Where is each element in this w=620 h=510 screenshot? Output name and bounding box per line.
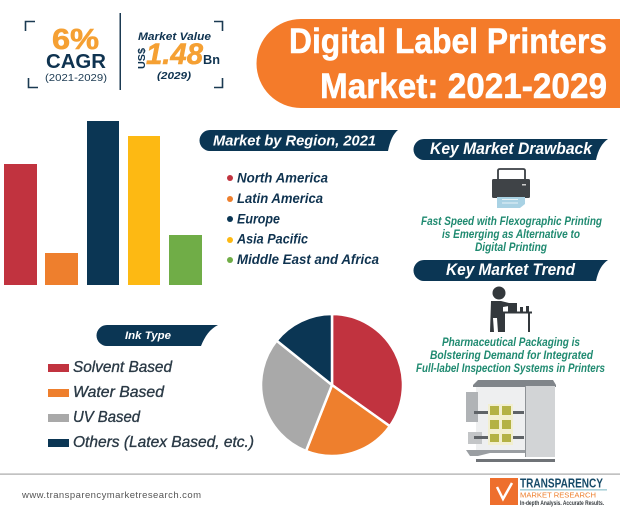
legend: regions: Latin America: [237, 191, 323, 206]
legend: regions: North America: [237, 170, 328, 186]
legend: regions: Asia Pacific: [236, 232, 308, 246]
legend: ink type: Water Based: [73, 384, 165, 401]
legend: ink type: Others (Latex Based, etc.): [73, 434, 254, 451]
logo mark: [490, 478, 518, 505]
heading: market by region: [200, 130, 398, 151]
heading: market by region: Market by Region, 2021: [213, 134, 376, 150]
text: market trend: [416, 337, 605, 375]
title banner: [256, 19, 620, 108]
CAGR period: (2021-2029): [45, 72, 107, 84]
heading: key market trend: [414, 260, 608, 281]
legend: regions: Europe: [237, 212, 280, 226]
text: market drawback: is Emerging as Alternative to: [442, 229, 580, 241]
pie chart: ink type: [261, 314, 403, 456]
text: market drawback: Digital Printing: [475, 242, 547, 254]
logo: Transparency Market Research: MARKET RESEARCH: [520, 490, 596, 500]
market value unit: Bn: [203, 52, 220, 67]
logo: Transparency Market Research: [490, 476, 607, 507]
legend: regions: [227, 170, 379, 267]
icon: person at desk: [490, 286, 532, 332]
bar chart: market by region: [4, 121, 202, 285]
text: market trend: Pharmaceutical Packaging is: [442, 337, 580, 349]
title banner: Market: 2021-2029: [320, 67, 607, 106]
legend: ink type: UV Based: [73, 409, 141, 426]
legend: regions: Middle East and Africa: [237, 252, 379, 267]
CAGR label: CAGR: [46, 51, 107, 73]
panel: KPI summary: [26, 13, 222, 90]
CAGR value: 6%: [52, 24, 99, 56]
market value label: Market Value: [138, 31, 211, 43]
illustration: label printing machine: [466, 380, 556, 462]
heading: ink type: [96, 325, 218, 346]
icon: printer: [492, 169, 530, 208]
legend: ink type: [48, 359, 254, 451]
heading: ink type: Ink Type: [125, 330, 171, 342]
text: market trend: Bolstering Demand for Integrated: [430, 350, 594, 362]
heading: key market drawback: Key Market Drawback: [430, 140, 593, 158]
market value year: (2029): [157, 71, 192, 82]
footer url: www.transparencymarketresearch.com: [21, 490, 201, 501]
heading: key market trend: Key Market Trend: [446, 261, 576, 279]
market value number: 1.48: [146, 38, 203, 71]
legend: ink type: Solvent Based: [73, 359, 173, 376]
currency label: US$: [136, 48, 148, 69]
text: market drawback: [421, 216, 602, 254]
